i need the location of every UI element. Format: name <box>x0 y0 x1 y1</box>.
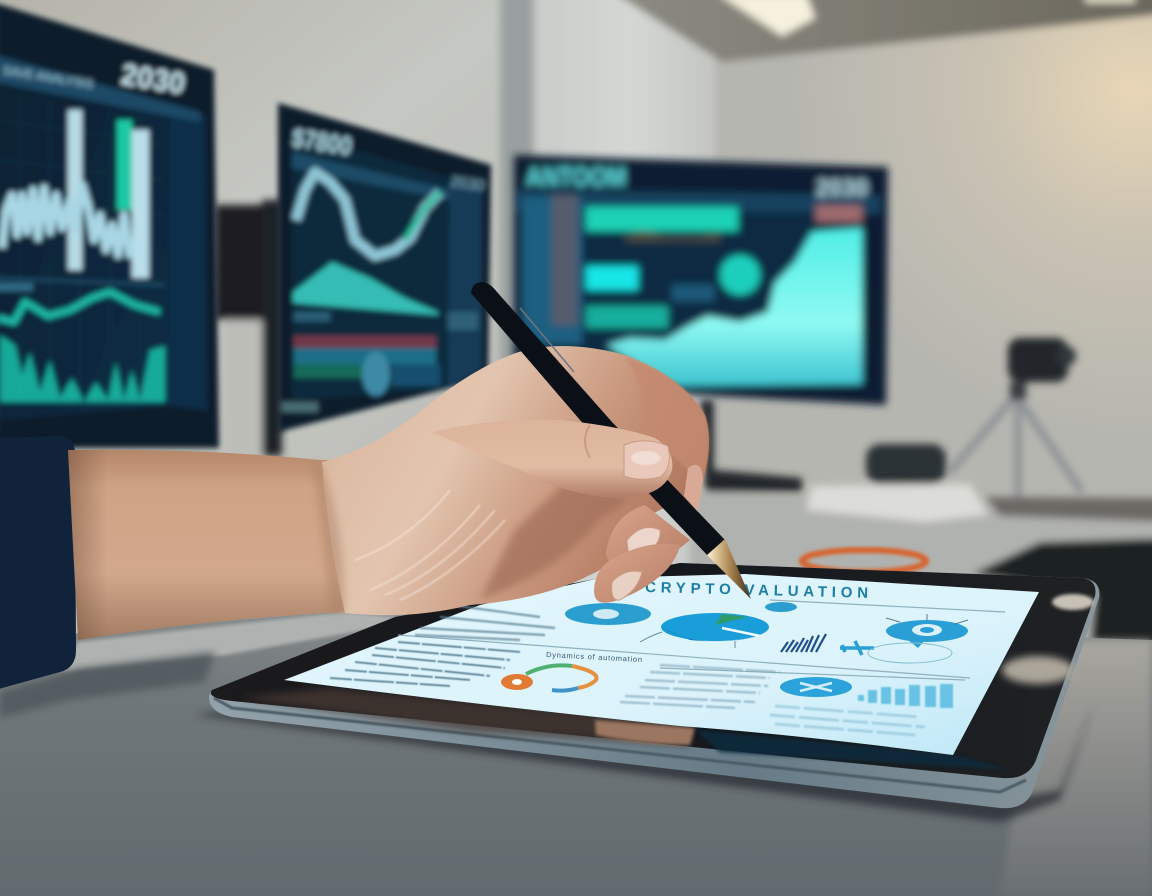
room background <box>0 0 1152 670</box>
tablet body <box>209 563 1099 808</box>
screen document <box>284 574 1039 755</box>
number: $7800: $7800 <box>290 122 354 161</box>
thumb nail <box>624 441 669 479</box>
thumb <box>432 420 672 498</box>
index knuckle shading <box>625 358 709 490</box>
upper text block <box>415 605 555 640</box>
teal mountain <box>293 262 438 315</box>
monitor stand block <box>215 200 282 456</box>
lower right text <box>770 706 925 735</box>
orange ring <box>802 550 926 572</box>
lower chart <box>0 278 165 402</box>
middle monitor <box>278 103 491 432</box>
cyan header text: ANTOOM <box>526 162 626 192</box>
ring nail <box>612 571 642 600</box>
right desk and background objects <box>690 338 1152 660</box>
bar chart <box>858 684 953 708</box>
icon: blue ellipse badge <box>565 603 651 625</box>
right monitor <box>514 155 888 405</box>
glass reflections <box>240 594 1094 770</box>
cyan area chart <box>607 228 862 386</box>
middle nail <box>627 528 660 560</box>
teal circle <box>720 255 760 295</box>
heading: monitor text: SAVE ANALYSIS <box>2 63 94 91</box>
number: 2030: 2030 <box>816 175 868 202</box>
monitor stand <box>700 400 802 492</box>
shelf <box>985 497 1152 522</box>
pen nib <box>707 539 751 599</box>
gauge <box>501 665 596 691</box>
teal bars <box>586 207 738 328</box>
tablet shadow <box>195 700 1095 822</box>
upper chart <box>2 110 149 278</box>
wrist shadow <box>312 462 345 612</box>
foreground desk <box>0 612 1152 896</box>
tripod camera <box>950 338 1082 498</box>
forearm <box>68 450 350 640</box>
divider lines <box>398 600 1005 680</box>
chair back <box>866 444 946 484</box>
left text block <box>330 642 520 686</box>
ring finger <box>594 544 680 603</box>
palm and index finger <box>322 346 709 615</box>
forearm and hand <box>68 346 709 640</box>
icon: blue cross circle <box>780 677 852 697</box>
small fingertip by pen <box>684 465 703 512</box>
dark chair <box>972 538 1152 650</box>
sleeve <box>0 436 76 690</box>
lower palm shadow <box>480 478 630 600</box>
tablet <box>209 563 1099 808</box>
number: 2030 small: 2030 <box>449 173 485 195</box>
icon: speech bubble <box>886 614 968 648</box>
pen <box>471 282 751 599</box>
stripes <box>282 312 478 412</box>
icon: small circle <box>765 602 797 612</box>
pie chart <box>640 613 769 648</box>
gauge heading: Dynamics of automation <box>546 650 642 664</box>
number: 2030: 2030 <box>119 58 187 101</box>
icon: bar lines <box>781 634 826 652</box>
left monitor <box>0 3 219 448</box>
notebook <box>806 484 988 522</box>
red tag <box>816 205 862 222</box>
document title: CRYPTO VALUATION <box>645 579 869 602</box>
line chart <box>296 172 440 256</box>
middle finger <box>606 505 690 566</box>
center text block <box>620 665 780 708</box>
tablet glass <box>211 563 1095 778</box>
icon: plane and orbit <box>840 641 952 663</box>
palm creases <box>355 490 505 600</box>
